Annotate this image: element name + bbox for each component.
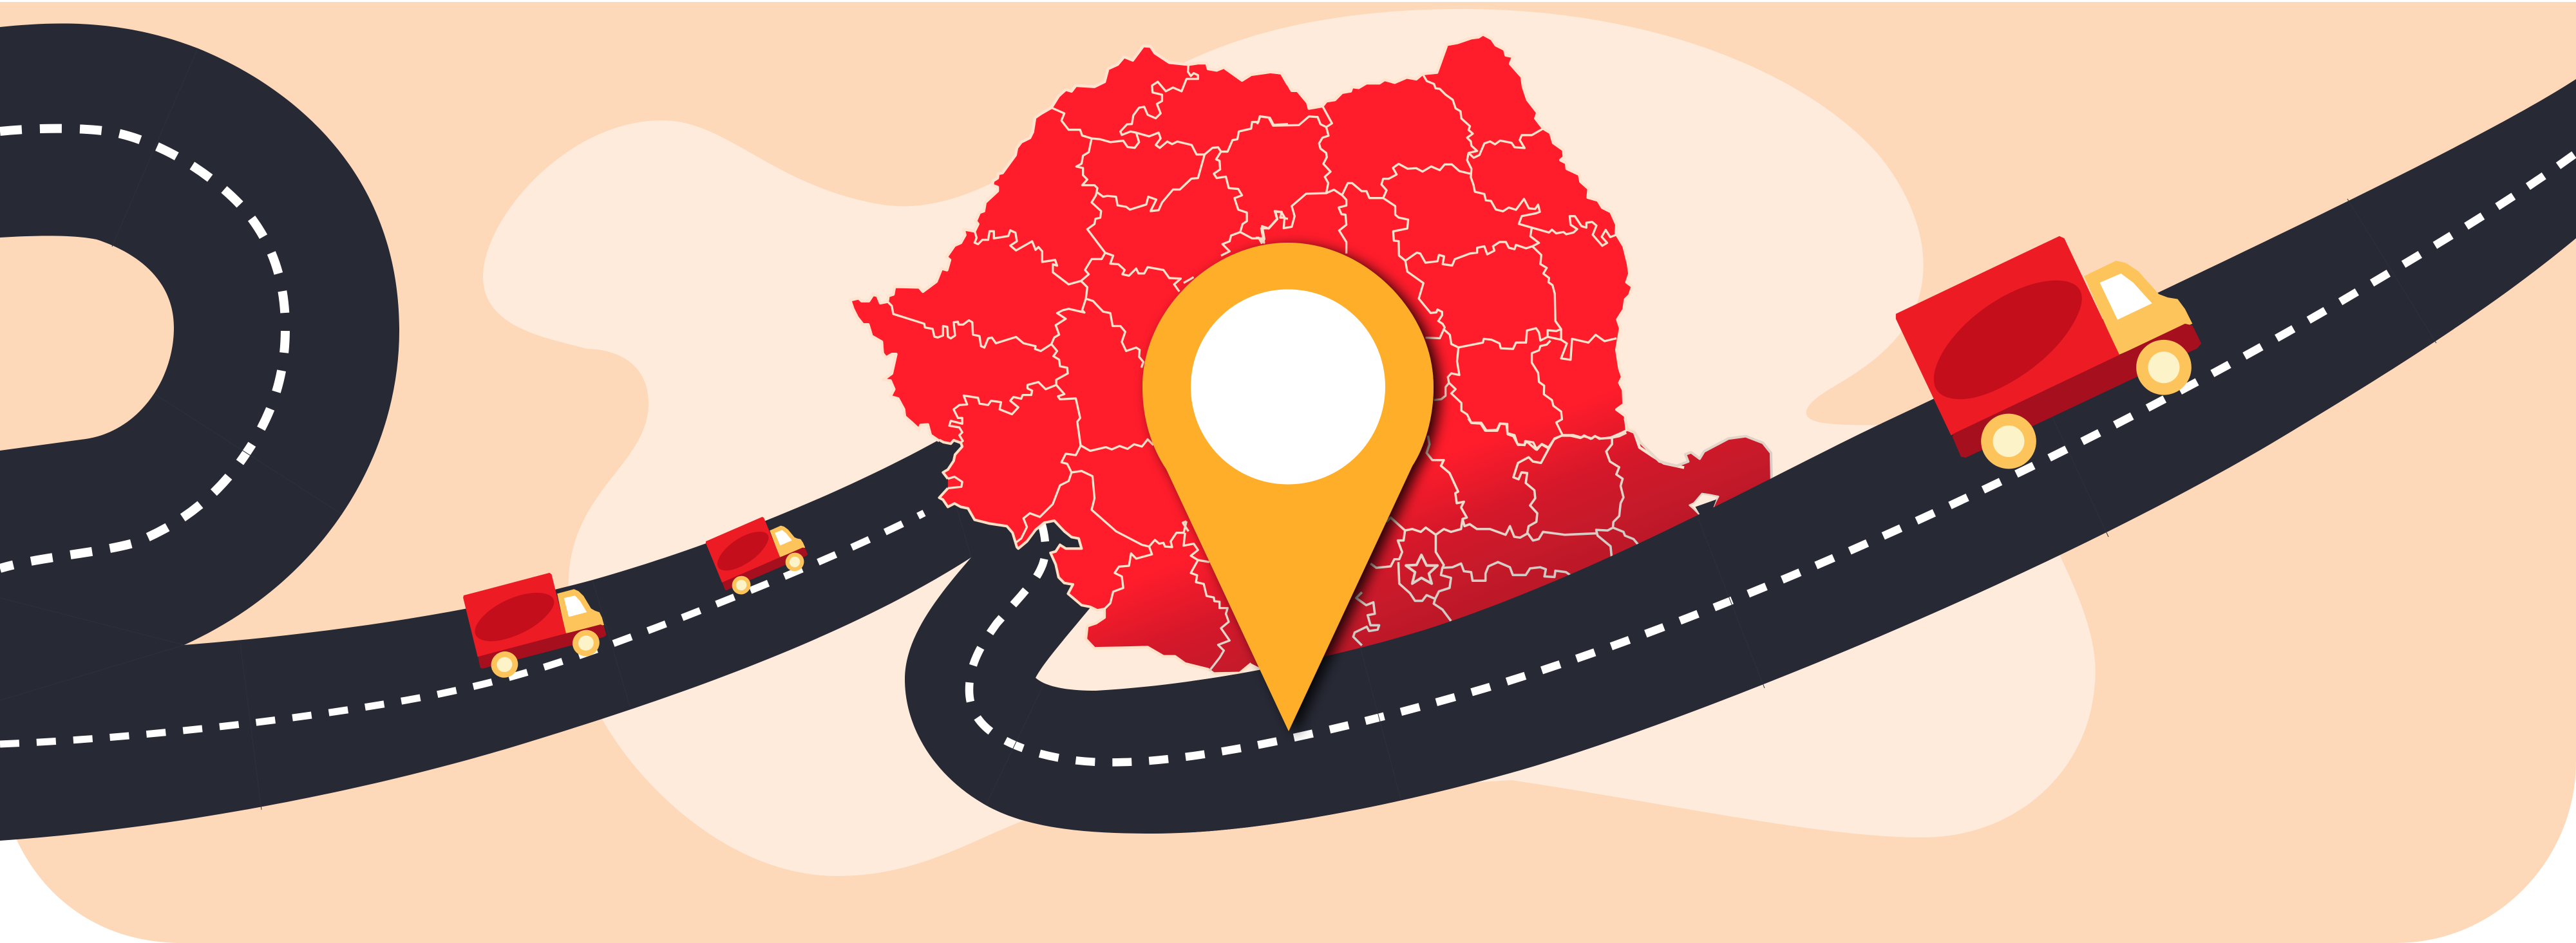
truck: medium bbox=[448, 559, 617, 694]
road: upper-left loop bbox=[0, 24, 399, 708]
capital star bbox=[1406, 555, 1437, 584]
truck: small far bbox=[703, 515, 810, 596]
icon: location pin bbox=[1142, 243, 1434, 731]
road: eastern highway over the map bbox=[1191, 79, 2576, 833]
background blob bbox=[483, 9, 2096, 876]
map fill bbox=[852, 36, 1770, 672]
map borders: south-east bbox=[1353, 418, 1772, 646]
map of Romania bbox=[849, 33, 1773, 675]
road: hairpin section under the map bbox=[905, 79, 2576, 834]
road: lower-left highway bbox=[0, 441, 1030, 841]
map borders: north-west bbox=[850, 46, 1288, 446]
map borders: south-west bbox=[939, 440, 1251, 673]
map borders: north-east bbox=[1256, 34, 1684, 467]
lagoon bbox=[1690, 494, 1718, 518]
truck: large foreground bbox=[1896, 236, 2201, 469]
